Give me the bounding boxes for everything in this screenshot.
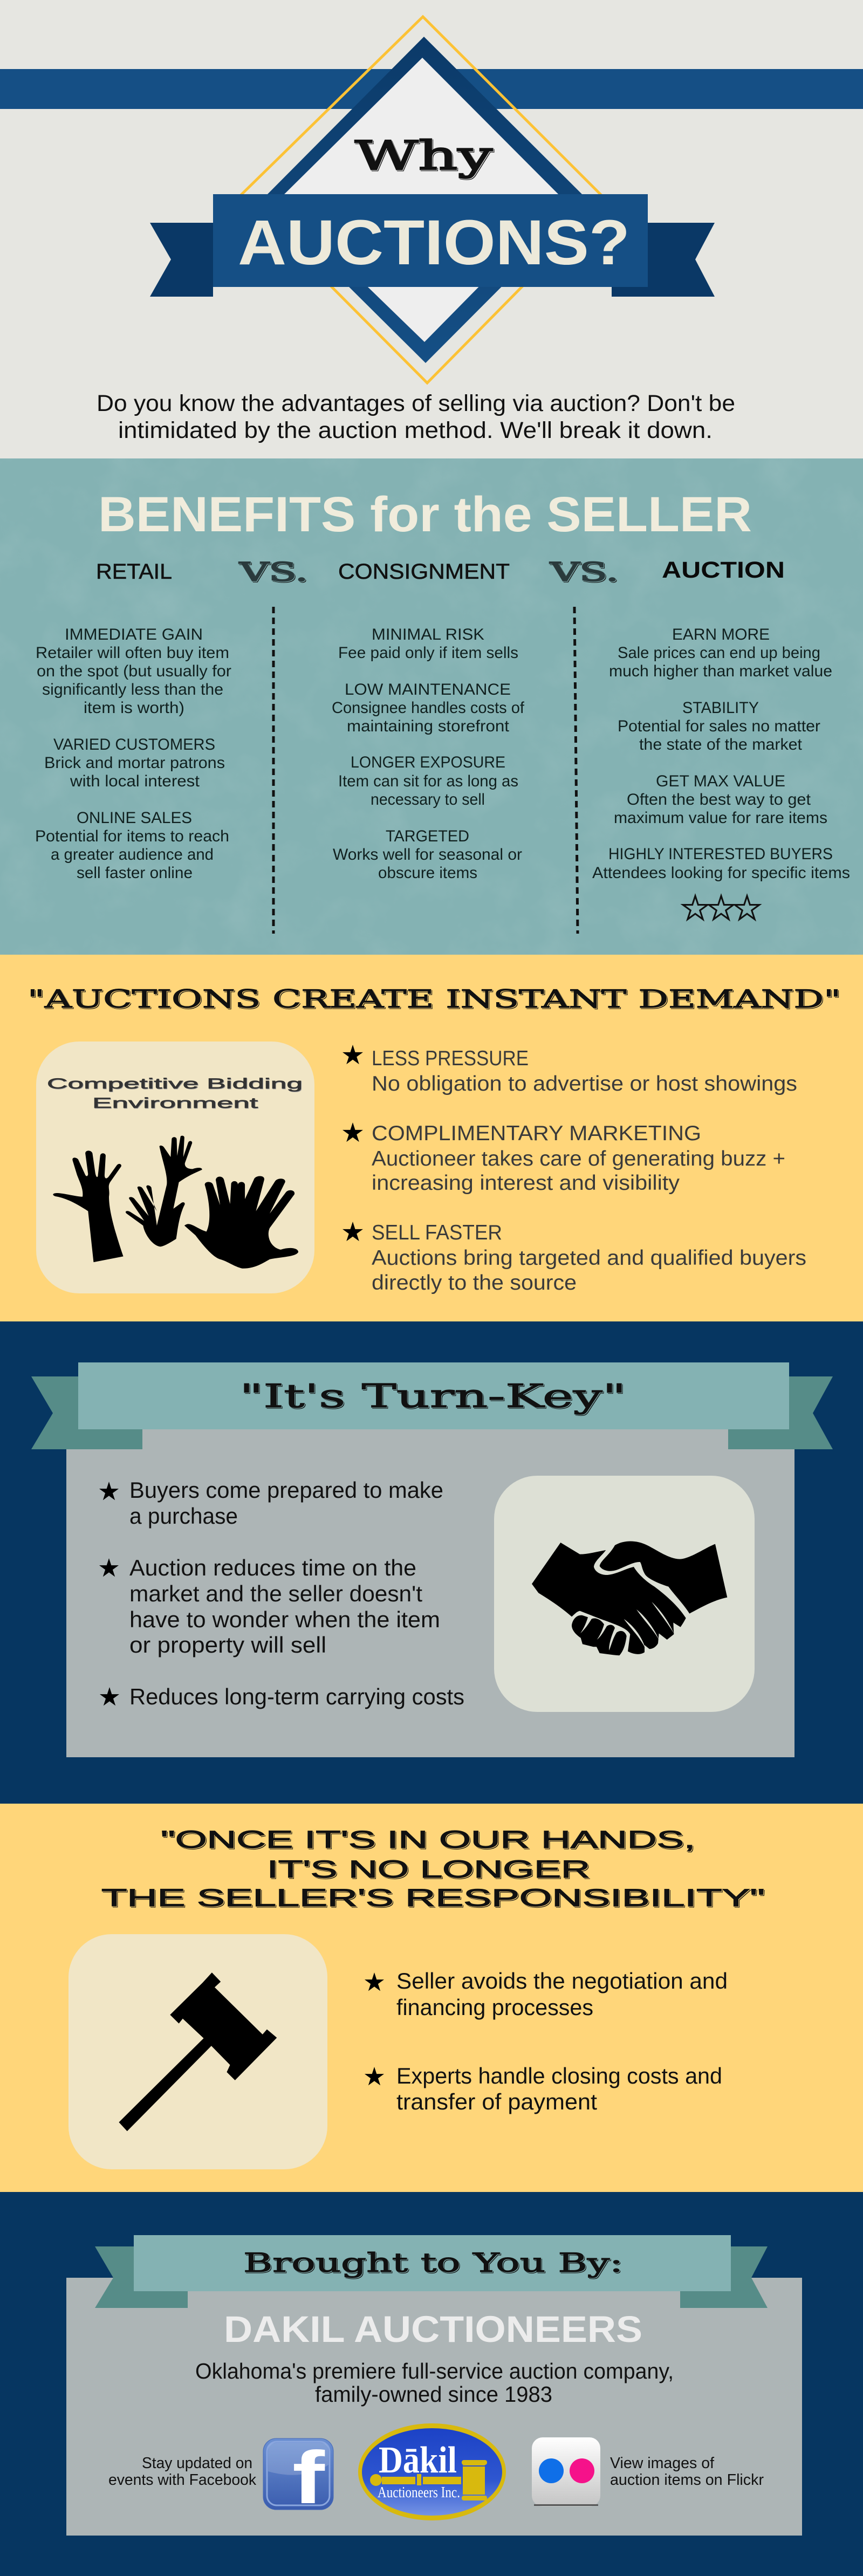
icon: flickr [532, 2437, 600, 2506]
bullet: negotiation: Seller avoids the negotiation and [396, 1968, 728, 1993]
bullet: sell faster: directly to the source [372, 1271, 577, 1294]
icon: facebook [263, 2436, 333, 2519]
consignment column: necessary to sell [371, 791, 485, 809]
panel: benefits for the seller [0, 458, 863, 955]
bullet: negotiation: financing processes [396, 1995, 593, 2020]
bullet: reduces time [99, 1555, 440, 1657]
heading: Brought to You By: [243, 2248, 623, 2278]
ribbon [31, 1362, 833, 1449]
card title: Competitive Bidding [47, 1075, 303, 1092]
logo: Dakil Auctioneers Inc. [358, 2423, 506, 2520]
bullet: buyers prepared: a purchase [129, 1503, 238, 1529]
bullet: reduces time: or property will sell [129, 1632, 326, 1657]
bullet: buyers prepared: Buyers come prepared to make [129, 1477, 443, 1503]
column heading: consignment: CONSIGNMENT [338, 560, 510, 584]
company name: DAKIL AUCTIONEERS [224, 2308, 642, 2350]
facebook caption [108, 2455, 256, 2489]
title word: AUCTIONS?: AUCTIONS? [238, 207, 630, 278]
consignment column: Works well for seasonal or [333, 846, 522, 864]
bullet: buyers prepared [99, 1477, 443, 1529]
icon: gavel [119, 1972, 277, 2131]
heading [101, 1826, 765, 1912]
auction column: STABILITY [682, 699, 759, 717]
heading: BENEFITS for the SELLER [98, 487, 752, 542]
auction column [592, 626, 850, 882]
icon: three outline stars [683, 896, 759, 919]
consignment column: LOW MAINTENANCE [345, 681, 511, 698]
consignment column: Fee paid only if item sells [338, 644, 518, 662]
consignment column: MINIMAL RISK [372, 626, 484, 643]
flickr caption [610, 2455, 764, 2489]
bullet: less pressure: No obligation to advertise or host showings [372, 1072, 797, 1095]
consignment column: Consignee handles costs of [332, 699, 525, 717]
retail column: Brick and mortar patrons [44, 754, 225, 772]
bullet: less pressure: LESS PRESSURE [372, 1047, 529, 1070]
card: gavel [69, 1934, 327, 2169]
auction column: Often the best way to get [627, 791, 811, 809]
column heading: retail: RETAIL [96, 560, 172, 584]
intro text [97, 390, 735, 443]
consignment column: maintaining storefront [347, 717, 510, 735]
facebook caption: Stay updated on [142, 2455, 252, 2472]
bullet: complimentary marketing: increasing interest and visibility [372, 1171, 680, 1195]
ribbon [95, 2235, 768, 2308]
auction column: GET MAX VALUE [656, 772, 785, 790]
retail column [35, 626, 231, 882]
bullet: negotiation [365, 1968, 728, 2020]
auction column: maximum value for rare items [614, 809, 827, 827]
bullet: closing costs: transfer of payment [396, 2089, 597, 2114]
consignment column [332, 626, 525, 882]
retail column: IMMEDIATE GAIN [65, 626, 203, 643]
top blue band [0, 69, 863, 109]
bullet: reduces time: have to wonder when the item [129, 1607, 440, 1632]
column heading: auction: AUCTION [662, 557, 785, 583]
company description: Oklahoma's premiere full-service auction company, [195, 2359, 674, 2383]
auction column: Potential for sales no matter [618, 717, 820, 735]
retail column: a greater audience and [51, 846, 214, 864]
navy diamond [262, 37, 588, 363]
bullet: complimentary marketing [343, 1122, 785, 1195]
auction column: HIGHLY INTERESTED BUYERS [608, 845, 833, 863]
vs 2: VS. [549, 557, 619, 587]
facebook caption: events with Facebook [108, 2471, 256, 2489]
grey content panel [66, 1413, 794, 1757]
retail column: ONLINE SALES [77, 809, 192, 827]
logo: Dakil Auctioneers Inc.: Auctioneers Inc. [378, 2484, 460, 2501]
company description [195, 2359, 674, 2407]
retail column: item is worth) [84, 699, 184, 717]
consignment column: TARGETED [386, 827, 469, 845]
heading: "It's Turn-Key" [239, 1378, 626, 1415]
white diamond [278, 58, 564, 342]
bullet: reduces time: market and the seller doesn't [129, 1581, 422, 1606]
bullet: sell faster: SELL FASTER [372, 1221, 502, 1244]
bullet: sell faster [343, 1221, 806, 1294]
retail column: significantly less than the [42, 681, 223, 698]
retail column: with local interest [70, 772, 200, 790]
card: competitive bidding [36, 1042, 314, 1293]
bullet: closing costs: Experts handle closing costs and [396, 2063, 722, 2088]
bullet: reduces time: Auction reduces time on the [129, 1555, 416, 1580]
heading: "ONCE IT'S IN OUR HANDS, [161, 1826, 695, 1853]
panel: turn-key [0, 1321, 863, 1804]
heading: "AUCTIONS CREATE INSTANT DEMAND" [28, 984, 841, 1013]
auction column: Sale prices can end up being [618, 644, 820, 662]
bullet: complimentary marketing: Auctioneer takes care of generating buzz + [372, 1147, 785, 1170]
bullet: complimentary marketing: COMPLIMENTARY MARKETING [372, 1122, 701, 1145]
grey content panel [66, 2278, 802, 2536]
bullet: carrying costs: Reduces long-term carrying costs [129, 1684, 464, 1709]
icon: handshake [532, 1541, 727, 1655]
auction column: the state of the market [639, 736, 803, 753]
panel: brought to you by [0, 2192, 863, 2576]
auction column: much higher than market value [609, 662, 832, 680]
panel: instant demand [0, 955, 863, 1321]
retail column: VARIED CUSTOMERS [53, 736, 215, 753]
icon: facebook: f [292, 2436, 325, 2519]
auction column: EARN MORE [672, 626, 770, 643]
title word: Why: Why [355, 133, 492, 179]
retail column: sell faster online [77, 864, 193, 882]
bullet: closing costs [365, 2063, 722, 2114]
retail column: on the spot (but usually for [37, 662, 231, 680]
consignment column: obscure items [378, 864, 477, 882]
flickr caption: View images of [610, 2455, 715, 2472]
card title [47, 1075, 303, 1111]
bullet: less pressure [343, 1045, 797, 1095]
logo gavel [370, 2460, 487, 2500]
retail column: Potential for items to reach [35, 827, 229, 845]
heading: IT'S NO LONGER [267, 1855, 590, 1883]
panel: seller's responsibility [0, 1804, 863, 2192]
intro text: Do you know the advantages of selling via auction? Don't be [97, 390, 735, 416]
flickr caption: auction items on Flickr [610, 2471, 764, 2489]
retail column: Retailer will often buy item [36, 644, 229, 662]
consignment column: LONGER EXPOSURE [351, 753, 505, 771]
card title: Environment [92, 1095, 258, 1111]
vs 1: VS. [238, 557, 308, 587]
heading: THE SELLER'S RESPONSIBILITY" [101, 1884, 765, 1912]
logo: Dakil Auctioneers Inc.: Dākil [379, 2440, 457, 2481]
panel: hero [0, 0, 863, 458]
gold diamond outline [235, 17, 607, 383]
auction column: Attendees looking for specific items [592, 864, 850, 882]
bullet: sell faster: Auctions bring targeted and qualified buyers [372, 1246, 806, 1270]
icon: raised hands [53, 1136, 298, 1269]
consignment column: Item can sit for as long as [338, 772, 518, 790]
card: handshake [494, 1476, 755, 1712]
intro text: intimidated by the auction method. We'll break it down. [118, 417, 713, 443]
company description: family-owned since 1983 [315, 2382, 552, 2407]
ribbon [150, 194, 715, 297]
